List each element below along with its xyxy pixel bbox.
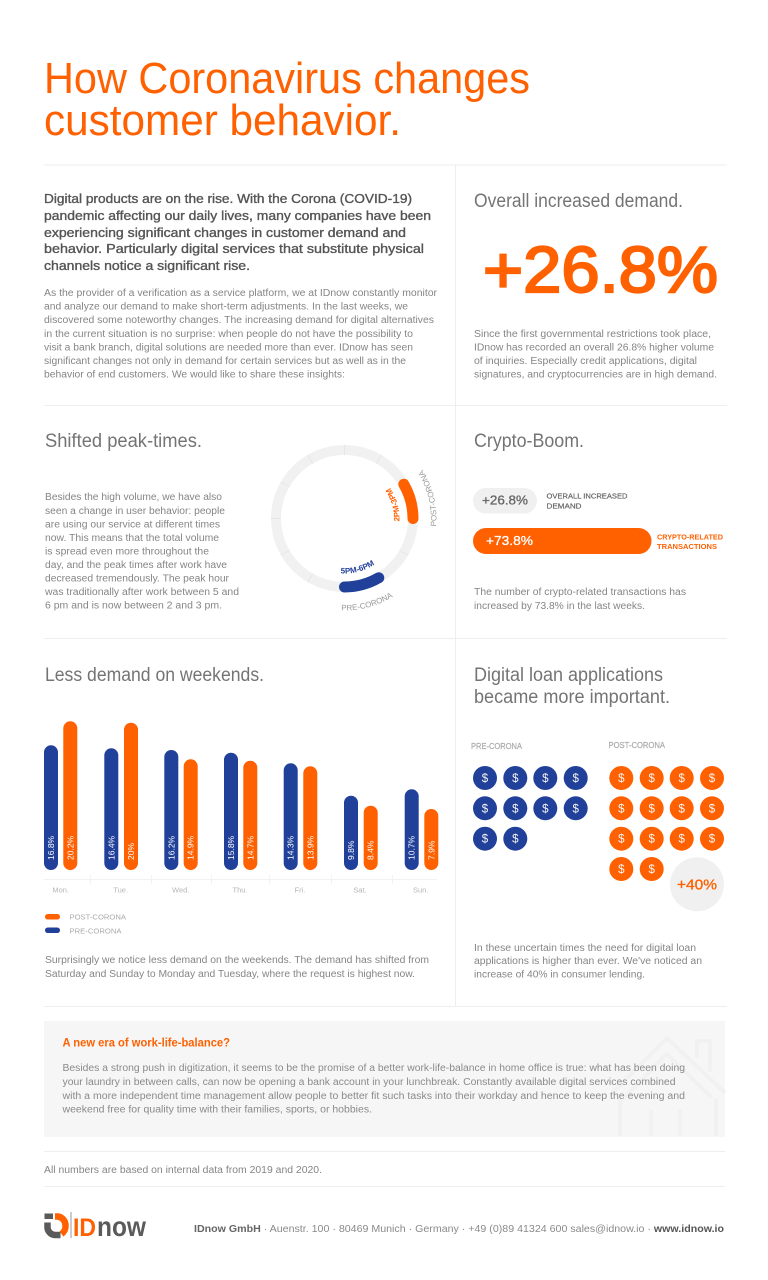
bars: Saturday [344,796,378,870]
logo: IDnow: ID [73,1214,96,1242]
+40% badge: +40% [677,876,717,894]
post-corona dollar icons: $ [618,773,625,785]
intro lead paragraph: Digital products are on the rise. With the Corona (COVID-19) [44,192,412,206]
post-corona dollar icons: $ [648,834,655,846]
panel: less demand on weekends [44,665,438,980]
footnote: All numbers are based on internal data from 2019 and 2020. [44,1165,322,1176]
intro lead paragraph: behavior. Particularly digital services that substitute physical [44,242,424,256]
big number: +26.8%: +26.8% [483,233,718,306]
weekday axis labels [52,886,428,894]
panel: introduction [44,192,438,380]
post-corona dollar icons: $ [678,803,685,815]
peak-times body text: decreased tremendously. The peak hour [45,574,230,584]
pre-corona dollar icons [473,766,588,851]
pre-corona dollar icons: $ [482,803,489,815]
intro body text: visit a bank branch, digital solutions are needed more than ever. IDnow has seen [44,342,413,354]
post-corona dollar icons [609,766,724,881]
weekday axis labels: Sun. [413,886,428,894]
post-corona label: POST-CORONA [608,741,666,750]
overall demand body text: of inquiries. Especially credit applications, digital [474,356,697,367]
intro lead paragraph [44,192,431,273]
crypto transactions bar [473,528,652,554]
heading: digital loan applications: became more important. [474,687,670,708]
bars: Friday: 14.3% [286,835,296,860]
bars: Saturday: 9.8% [346,840,356,860]
overall demand body text [474,329,717,380]
overall demand body text: IDnow has recorded an overall 26.8% higher volume [474,342,714,354]
callout body text: weekend free for quality time with their families, sports, or hobbies. [61,1104,372,1116]
bars: Friday [284,763,317,870]
label: 5PM-6PM: 5PM-6PM [340,560,374,574]
peak-times body text: is spread even more throughout the [45,546,209,558]
weekday axis labels: Mon. [52,886,69,894]
intro lead paragraph: channels notice a significant rise. [44,259,250,273]
pre-corona dollar icons: $ [542,803,549,815]
intro lead paragraph: pandemic affecting our daily lives, many companies have been [44,209,431,223]
crypto transactions label: TRANSACTIONS [657,542,717,551]
crypto body text: increased by 73.8% in the last weeks. [474,601,645,612]
chart legend [45,912,126,936]
crypto transactions label [657,532,724,551]
post-corona peak arc [404,484,413,518]
heading: shifted peak-times: Shifted peak-times. [45,431,202,452]
heading: digital loan applications [474,665,670,708]
bars: Tuesday: 20% [126,843,136,860]
label: 2PM-3PM: 2PM-3PM [386,488,400,522]
peak-times body text: was traditionally after work between 5 and [44,587,239,598]
post-corona dollar icons: $ [648,803,655,815]
pre-corona dollar icons: $ [542,773,549,785]
peak-times body text: 6 pm and is now between 2 and 3 pm. [45,600,222,612]
bars: Tuesday: 16.4% [106,835,116,860]
pre-corona dollar icons: $ [512,834,519,846]
bars: Thursday: 14.7% [245,835,255,860]
post-corona dollar icons: $ [709,834,716,846]
weekday axis labels: Wed. [172,886,189,894]
weekend body text: Surprisingly we notice less demand on the weekends. The demand has shifted from [45,955,429,966]
intro body text: behavior of end customers. We would like to share these insights: [44,370,345,380]
overall demand label: DEMAND [546,502,582,510]
icon: house watermark [612,1038,725,1136]
panel: digital loan applications [471,665,724,980]
overall demand pill [473,488,537,514]
post-corona dollar icons: $ [648,864,655,876]
post-corona dollar icons: $ [678,834,685,846]
pre-corona dollar icons: $ [512,773,519,785]
post-corona dollar icons: $ [648,773,655,785]
bars: Monday: 20.2% [65,835,75,860]
+40% badge [670,857,724,911]
callout body text: your laundry in between calls, can now be opening a bank account in your lunchbreak. Constantly available digital services combined [62,1077,676,1088]
post-corona dollar icons: $ [618,834,625,846]
heading: less demand on weekends: Less demand on weekends. [45,665,264,686]
peak-times body text: Besides the high volume, we have also [45,492,222,503]
intro body text: As the provider of a verification as a service platform, we at IDnow constantly monitor [44,288,438,299]
callout heading: A new era of work-life-balance? [62,1038,230,1050]
bar chart: demand per weekday [44,721,438,894]
loan body text [474,943,702,980]
label: POST-CORONA: POST-CORONA [419,470,436,526]
title: How Coronavirus changes [44,54,530,103]
intro body text: and analyze our demand to make short-term adjustments. In the last weeks, we [44,302,408,312]
pre-corona dollar icons: $ [482,773,489,785]
heading: crypto-boom: Crypto-Boom. [474,431,584,452]
bars: Monday [44,721,77,870]
bars: Wednesday [164,750,198,870]
intro body text [44,288,438,380]
bars: Wednesday: 16.2% [166,835,176,860]
heading: digital loan applications: Digital loan applications [474,665,663,686]
peak-times body text: seen a change in user behavior: people [45,506,225,517]
crypto transactions label: CRYPTO-RELATED [657,532,724,542]
clock ring chart [271,445,436,610]
pre-corona label: PRE-CORONA [471,742,523,751]
overall demand label: OVERALL INCREASED [546,492,628,500]
post-corona dollar icons: $ [709,773,716,785]
callout body text [61,1063,685,1116]
bars: Tuesday [104,723,138,870]
callout body text: with a more independent time management allow people to better fit such tasks into their workday and hence to keep the evening and [61,1091,685,1102]
panel: work-life-balance callout [44,1021,725,1137]
pre-corona peak arc [344,578,379,587]
overall demand label [546,492,628,510]
peak-times body text: now. This means that the total volume [45,533,219,544]
post-corona dollar icons: $ [618,864,625,876]
loan body text: increase of 40% in consumer lending. [474,970,645,980]
overall demand body text: Since the first governmental restrictions took place, [474,329,711,340]
post-corona dollar icons: $ [678,773,685,785]
crypto transactions bar: +73.8% [486,534,533,548]
peak-times body text [44,492,239,612]
bars: Saturday: 8.4% [366,840,376,860]
crypto body text [474,587,686,612]
post-corona dollar icons: $ [709,803,716,815]
label: PRE-CORONA: PRE-CORONA [342,593,393,610]
weekend body text [45,955,429,980]
footer contact line: IDnow GmbH · Auenstr. 100 · 80469 Munich · Germany · +49 (0)89 41324 600 sales@idnow.io · www.idnow.io [194,1223,724,1235]
loan body text: applications is higher than ever. We've noticed an [474,956,702,967]
bars: Sunday: 7.9% [426,840,436,860]
bars: Monday: 16.8% [46,835,56,860]
panel: shifted peak-times [44,431,436,612]
crypto body text: The number of crypto-related transactions has [474,587,686,598]
pre-corona dollar icons: $ [572,803,579,815]
weekday axis labels: Tue. [113,886,128,894]
logo: IDnow [44,1211,146,1242]
pre-corona dollar icons: $ [482,834,489,846]
overall demand pill: +26.8% [482,494,528,508]
weekday axis labels: Fri. [295,886,305,894]
title [44,54,530,145]
intro body text: in the current situation is no surprise: when people do not have the possibility to [44,329,413,340]
title: customer behavior. [44,96,401,145]
overall demand body text: signatures, and cryptocurrencies are in high demand. [474,370,717,380]
callout body text: Besides a strong push in digitization, it seems to be the promise of a better work-life-balance in home office is true: what has been doing [62,1063,685,1074]
pre-corona dollar icons: $ [572,773,579,785]
post-corona dollar icons: $ [618,803,625,815]
bars: Friday: 13.9% [305,835,315,860]
chart legend: PRE-CORONA [70,926,122,936]
loan body text: In these uncertain times the need for digital loan [474,943,696,954]
peak-times body text: are using our service at different times [45,520,220,530]
panel: crypto-boom [473,431,724,612]
bars: Wednesday: 14.9% [186,835,196,860]
weekday axis labels: Thu. [232,886,248,894]
peak-times body text: day, and the peak times after work have [45,560,227,571]
logo: IDnow: now [97,1211,146,1242]
intro body text: significant changes not only in demand for certain services but as well as in the [44,356,406,367]
bars: Thursday: 15.8% [226,835,236,860]
weekend body text: Saturday and Sunday to Monday and Tuesday, where the request is highest now. [45,969,415,980]
bars: Sunday: 10.7% [407,835,417,860]
pre-corona dollar icons: $ [512,803,519,815]
chart legend: POST-CORONA [70,912,126,922]
intro body text: discovered some noteworthy changes. The increasing demand for digital alternatives [44,315,434,326]
bars: Thursday [224,753,257,870]
intro lead paragraph: experiencing significant changes in customer demand and [44,226,406,240]
heading: overall increased demand: Overall increased demand. [474,191,683,212]
bars: Sunday [405,789,438,870]
panel: overall increased demand [474,191,718,380]
weekday axis labels: Sat. [353,886,367,894]
